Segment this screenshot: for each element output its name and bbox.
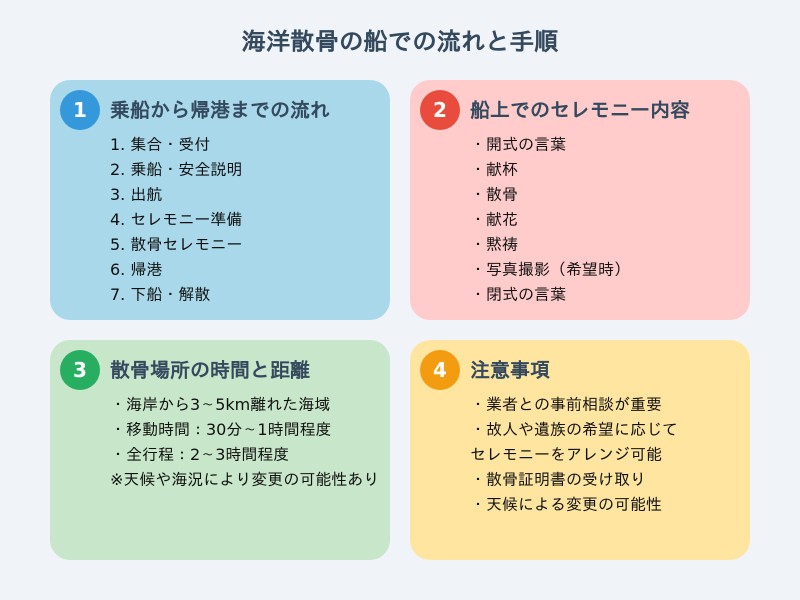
list: panel 1 steps: 3. 出航	[110, 185, 162, 204]
title: 海洋散骨の船での流れと手順	[241, 27, 559, 56]
list: panel 2 items: ・写真撮影（希望時）	[470, 260, 630, 279]
list: panel 1 steps: 2. 乗船・安全説明	[110, 160, 242, 179]
list: panel 2 items: ・開式の言葉	[470, 135, 566, 154]
list: panel 1 steps: 5. 散骨セレモニー	[110, 235, 242, 254]
list: panel 1 steps: 1. 集合・受付	[110, 135, 210, 154]
list: panel 4 items: ・天候による変更の可能性	[470, 495, 662, 514]
list: panel 3 items: ・移動時間：30分～1時間程度	[110, 420, 332, 439]
heading: panel 2: 船上でのセレモニー内容	[470, 98, 690, 122]
list: panel 2 items: ・黙祷	[470, 235, 518, 254]
list: panel 3 items: ※天候や海況により変更の可能性あり	[110, 470, 379, 489]
list: panel 1 steps: 6. 帰港	[110, 260, 162, 279]
panel: 乗船から帰港までの流れ	[50, 80, 390, 320]
list: panel 3 items: ・全行程：2～3時間程度	[110, 445, 289, 464]
panel: 注意事項	[410, 340, 750, 560]
icon: number 2	[420, 90, 460, 130]
list: panel 1 steps	[110, 135, 242, 304]
list: panel 2 items: ・献杯	[470, 160, 518, 179]
icon: number 3	[60, 350, 100, 390]
icon: number 3: 3	[73, 358, 87, 382]
list: panel 2 items: ・献花	[470, 210, 518, 229]
icon: number 2: 2	[433, 98, 447, 122]
panel: 船上でのセレモニー内容	[410, 80, 750, 320]
list: panel 3 items: ・海岸から3～5km離れた海域	[110, 395, 330, 414]
icon: number 4: 4	[433, 358, 447, 382]
list: panel 3 items	[110, 395, 379, 489]
list: panel 4 items: ・故人や遺族の希望に応じて	[470, 420, 678, 439]
list: panel 4 items: ・業者との事前相談が重要	[470, 395, 662, 414]
heading: panel 4: 注意事項	[470, 358, 550, 382]
heading: panel 1: 乗船から帰港までの流れ	[110, 98, 330, 122]
icon: number 1	[60, 90, 100, 130]
list: panel 4 items	[470, 395, 678, 514]
panel: 散骨場所の時間と距離	[50, 340, 390, 560]
list: panel 4 items: ・散骨証明書の受け取り	[470, 470, 646, 489]
list: panel 2 items: ・閉式の言葉	[470, 285, 566, 304]
list: panel 2 items: ・散骨	[470, 185, 518, 204]
icon: number 1: 1	[73, 98, 87, 122]
list: panel 4 items: セレモニーをアレンジ可能	[470, 445, 662, 464]
list: panel 1 steps: 4. セレモニー準備	[110, 210, 242, 229]
icon: number 4	[420, 350, 460, 390]
heading: panel 3: 散骨場所の時間と距離	[110, 358, 310, 382]
list: panel 2 items	[470, 135, 630, 304]
list: panel 1 steps: 7. 下船・解散	[110, 285, 210, 304]
